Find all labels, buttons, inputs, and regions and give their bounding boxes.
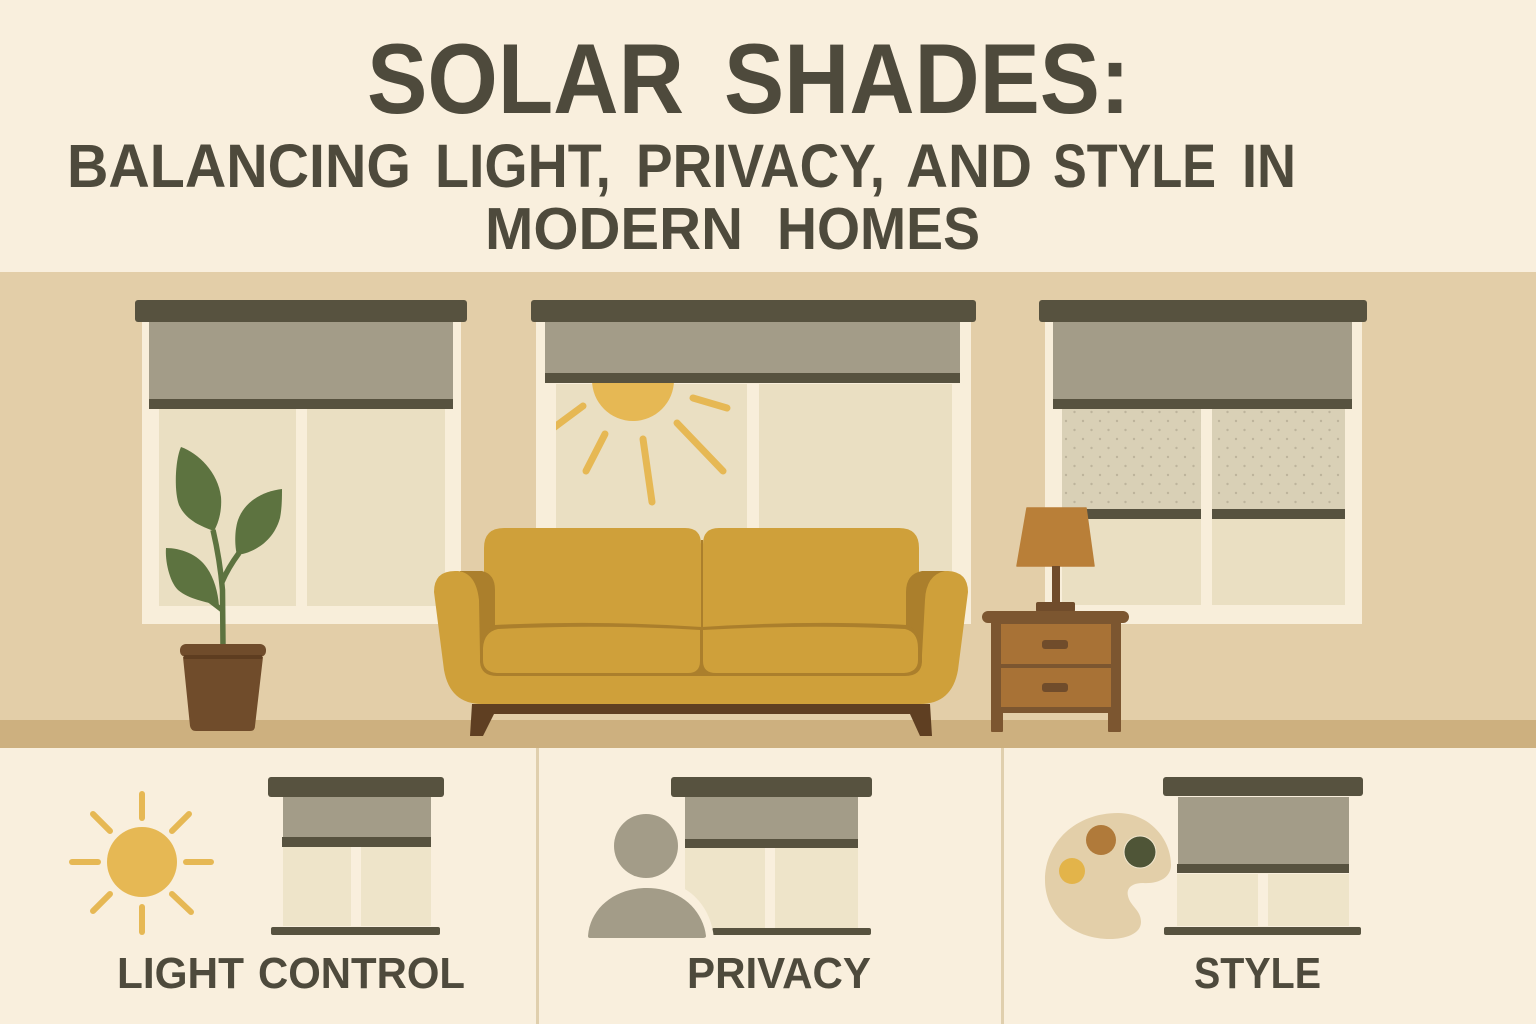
label: CONTROL — [258, 949, 465, 998]
title: MODERN — [485, 196, 743, 262]
sofa — [434, 528, 968, 736]
window: right with patterned shade — [1039, 300, 1367, 624]
title: PRIVACY, — [636, 132, 885, 200]
room scene wall — [0, 272, 1536, 720]
icon: person silhouette — [588, 814, 714, 940]
nightstand and lamp — [982, 508, 1129, 732]
icon: window with shade — [1163, 777, 1363, 935]
plant — [166, 447, 282, 731]
label: PRIVACY — [687, 949, 871, 998]
icon: sun — [72, 794, 211, 932]
icon: sun — [556, 383, 730, 506]
panel: privacy — [588, 777, 872, 998]
label: LIGHT — [117, 949, 244, 998]
icon: window with shade — [671, 777, 872, 935]
icon: paint palette — [1045, 813, 1171, 939]
window: center with sun — [531, 300, 976, 624]
panel: light control — [72, 777, 465, 998]
panel dividers — [536, 748, 539, 1024]
title: STYLE — [1053, 132, 1216, 200]
icon: window with shade — [268, 777, 444, 935]
title: SHADES: — [724, 23, 1130, 134]
title: AND — [906, 132, 1032, 200]
title: BALANCING — [67, 132, 411, 200]
label — [117, 949, 465, 998]
title — [67, 23, 1296, 262]
title: HOMES — [777, 196, 980, 262]
label: STYLE — [1194, 949, 1321, 998]
floor — [0, 720, 1536, 748]
title: SOLAR — [367, 23, 684, 134]
window: left — [135, 300, 467, 624]
title: IN — [1242, 132, 1296, 200]
panel: style — [1045, 777, 1363, 998]
title: LIGHT, — [435, 132, 611, 200]
